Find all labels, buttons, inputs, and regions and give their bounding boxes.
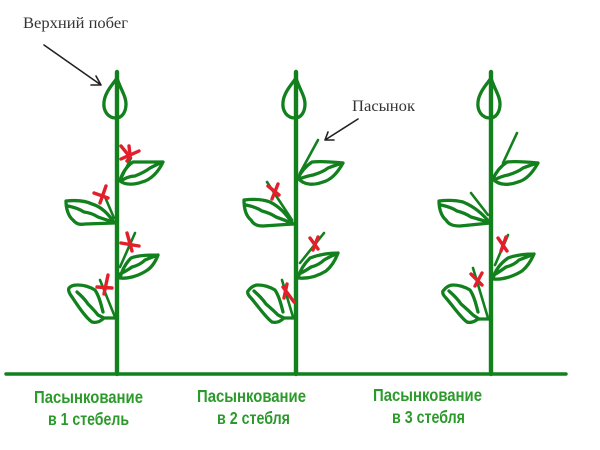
stem 2 xyxy=(294,72,298,374)
label: top shoot: Верхний побег xyxy=(23,15,128,32)
upper left leaf 3 xyxy=(439,200,490,226)
top leaf 3 xyxy=(478,78,500,118)
stem 3 xyxy=(489,72,493,374)
red cross marks 1 xyxy=(94,146,139,294)
upper right leaf 1 xyxy=(120,162,163,184)
side shoots 1 xyxy=(100,158,135,317)
plant 2: two stems xyxy=(244,72,343,374)
caption: one stem: в 1 стебель xyxy=(48,409,129,429)
upper left leaf 2 xyxy=(244,199,293,226)
lower right leaf 2 xyxy=(298,253,338,278)
upper right leaf 2 xyxy=(298,162,343,184)
lower right leaf 1 xyxy=(120,255,158,278)
lower left leaf 2 xyxy=(248,285,296,322)
lower left leaf 3 xyxy=(443,285,489,322)
red cross marks 2 xyxy=(268,184,318,302)
side shoots 2 xyxy=(267,140,324,317)
label: side shoot: Пасынок xyxy=(352,98,415,115)
caption: two stems: Пасынкование xyxy=(197,386,306,406)
stem 1 xyxy=(115,72,119,374)
caption: one stem: Пасынкование xyxy=(34,387,143,407)
side shoots 3 xyxy=(471,133,517,318)
caption: three stems: в 3 стебля xyxy=(392,407,465,427)
lower right leaf 3 xyxy=(493,254,534,279)
ground line xyxy=(6,372,566,376)
red cross marks 3 xyxy=(471,237,507,286)
arrow to side shoot xyxy=(325,119,358,140)
upper left leaf 1 xyxy=(66,201,114,224)
plant 1: one stem xyxy=(66,72,163,374)
caption: three stems: Пасынкование xyxy=(373,385,482,405)
top leaf 1 xyxy=(104,78,126,118)
top leaf 2 xyxy=(283,78,305,118)
plant 3: three stems xyxy=(439,72,538,374)
arrow to top shoot xyxy=(44,45,101,85)
lower left leaf 1 xyxy=(69,285,117,322)
caption: two stems: в 2 стебля xyxy=(217,408,290,428)
upper right leaf 3 xyxy=(493,162,538,184)
